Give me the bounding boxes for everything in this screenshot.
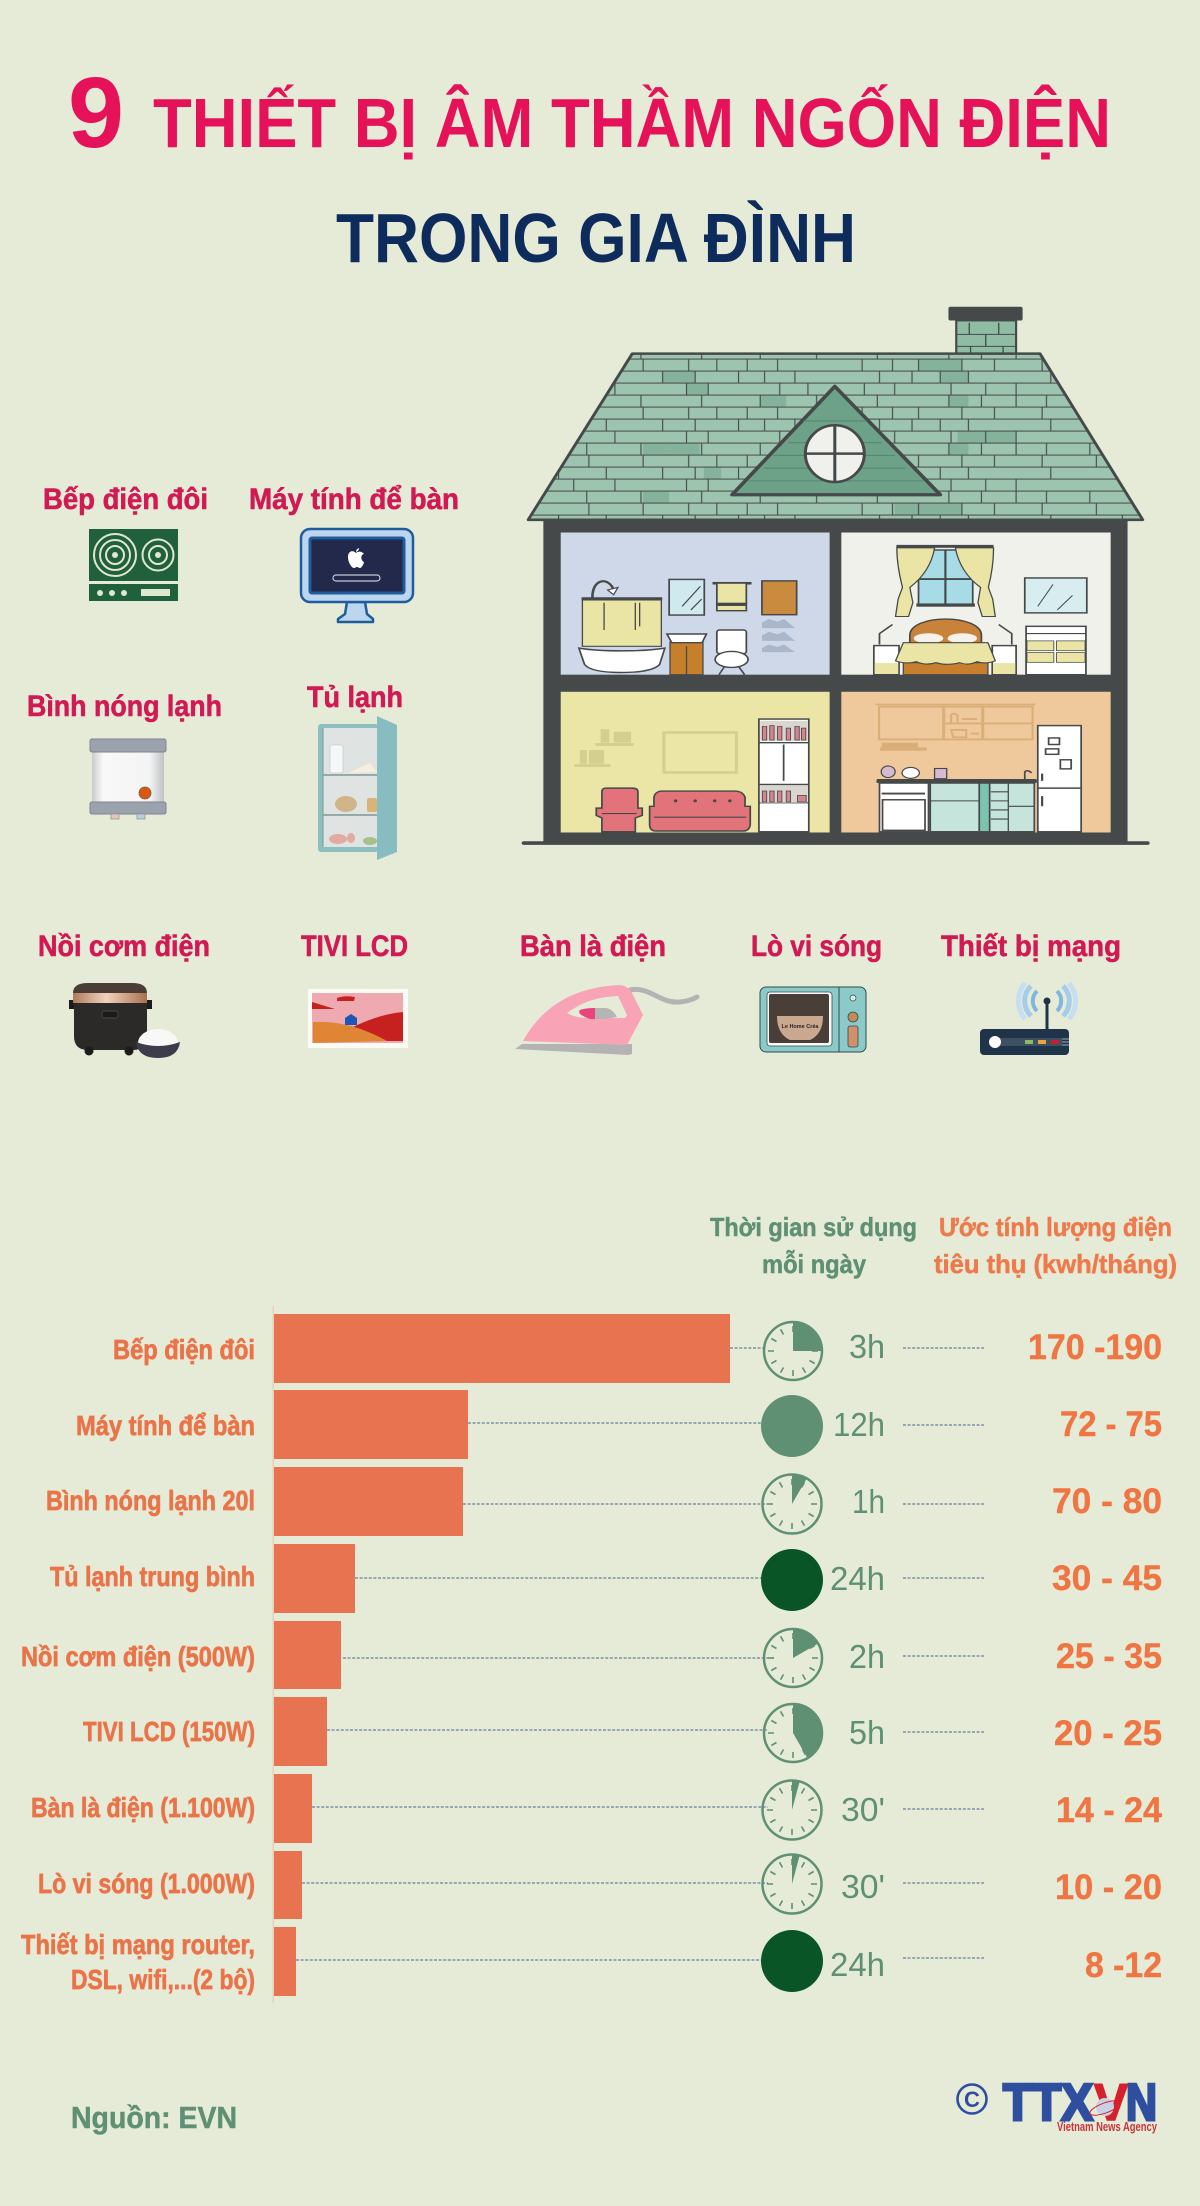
row: Bình nóng lạnh 20l: 70 - 80 (1052, 1482, 1162, 1521)
row: Thiết bị mạng: 8 -12 (1085, 1946, 1162, 1985)
device labels and icons (27, 483, 1121, 1058)
logo: TTXVN: N (1126, 2074, 1157, 2132)
dormer with round window (732, 386, 940, 495)
room: kitchen (841, 692, 1111, 832)
row: Thiết bị mạng (21, 1927, 1162, 1996)
row: Nồi cơm điện: 25 - 35 (1056, 1637, 1162, 1676)
room: bedroom (841, 533, 1111, 675)
label: Bếp điện đôi (43, 483, 208, 516)
icon: stove (89, 529, 178, 601)
logo: TTXVN: C (964, 2087, 980, 2112)
row: TIVI LCD: TIVI LCD (150W) (83, 1716, 255, 1747)
row: Bàn là điện: 14 - 24 (1056, 1791, 1163, 1830)
label: Bình nóng lạnh (27, 690, 222, 723)
row: Lò vi sóng (38, 1851, 1162, 1919)
device: desktop computer (249, 483, 459, 622)
device: double electric stove (43, 483, 208, 601)
icon: water heater (90, 739, 166, 819)
label: Thiết bị mạng (941, 930, 1121, 963)
row: Bàn là điện: 30' (841, 1791, 885, 1828)
label: TIVI LCD (301, 930, 408, 963)
row: Thiết bị mạng: Thiết bị mạng router, (21, 1929, 255, 1960)
device: LCD TV (301, 930, 408, 1048)
row: Tủ lạnh trung bình: 24h (830, 1560, 885, 1597)
row: Máy tính để bàn: 12h (833, 1406, 885, 1443)
row: Bàn là điện (31, 1774, 1163, 1843)
device: microwave (751, 930, 882, 1052)
source: Nguồn: EVN (71, 2100, 237, 2135)
row: Bình nóng lạnh 20l: Bình nóng lạnh 20l (46, 1485, 255, 1516)
title line 1: THIẾT BỊ ÂM THẦM NGỐN ĐIỆN (153, 83, 1111, 162)
logo: TTXVN: V (1094, 2074, 1128, 2132)
device: electric iron (515, 930, 697, 1055)
header: estimated consumption: tiêu thụ (kwh/tháng) (934, 1249, 1177, 1279)
title line 2: TRONG GIA ĐÌNH (336, 199, 856, 277)
row: Lò vi sóng: 30' (841, 1868, 885, 1905)
label: Máy tính để bàn (249, 483, 459, 516)
title (68, 57, 1111, 277)
room: bathroom (561, 533, 830, 675)
bar chart (21, 1306, 1163, 2003)
row: Nồi cơm điện: 2h (849, 1638, 885, 1675)
header: estimated consumption: Ước tính lượng điện (939, 1212, 1172, 1242)
row: Bếp điện đôi: 3h (849, 1328, 885, 1365)
label: Tủ lạnh (307, 681, 403, 714)
header: daily usage time: Thời gian sử dụng (710, 1212, 917, 1242)
house walls (522, 520, 1150, 845)
row: Máy tính để bàn (76, 1390, 1162, 1459)
row: Thiết bị mạng: DSL, wifi,...(2 bộ) (71, 1964, 255, 1995)
row: TIVI LCD: 5h (849, 1714, 885, 1751)
icon: iron (515, 985, 697, 1055)
row: Nồi cơm điện (21, 1621, 1162, 1689)
icon: rice cooker (69, 983, 180, 1058)
logo: TTXVN (958, 2074, 1158, 2134)
icon: microwave: Le Home Créa (782, 1024, 819, 1030)
header: daily usage time: mỗi ngày (762, 1249, 866, 1279)
logo: TTXVN: TTX (1003, 2074, 1093, 2132)
row: Bếp điện đôi: Bếp điện đôi (113, 1334, 255, 1365)
label: Bàn là điện (520, 930, 666, 963)
row: TIVI LCD: 20 - 25 (1054, 1714, 1162, 1753)
header: estimated consumption (934, 1212, 1177, 1279)
device: refrigerator (307, 681, 403, 860)
row: TIVI LCD (83, 1697, 1162, 1766)
device: rice cooker (38, 930, 210, 1058)
row: Bình nóng lạnh 20l (46, 1467, 1162, 1536)
device: water heater (27, 690, 222, 819)
icon: TV picture (308, 989, 408, 1048)
house illustration (522, 307, 1150, 845)
row: Bếp điện đôi: 170 -190 (1028, 1328, 1162, 1367)
row: Thiết bị mạng: 24h (830, 1946, 885, 1983)
icon: router (980, 983, 1076, 1055)
row: Bàn là điện: Bàn là điện (1.100W) (31, 1792, 255, 1823)
row: Bình nóng lạnh 20l: 1h (852, 1483, 885, 1520)
label: Nồi cơm điện (38, 930, 210, 963)
row: Tủ lạnh trung bình: 30 - 45 (1052, 1559, 1162, 1598)
row: Tủ lạnh trung bình: Tủ lạnh trung bình (50, 1561, 255, 1592)
row: Lò vi sóng: 10 - 20 (1055, 1868, 1162, 1907)
logo: TTXVN: Vietnam News Agency (1057, 2119, 1158, 2134)
row: Bếp điện đôi (113, 1314, 1162, 1383)
room: living room (561, 692, 830, 832)
column headers (710, 1212, 1177, 1279)
row: Máy tính để bàn: 72 - 75 (1060, 1405, 1162, 1444)
label: Lò vi sóng (751, 930, 882, 963)
row: Lò vi sóng: Lò vi sóng (1.000W) (38, 1868, 255, 1899)
icon: open fridge (318, 716, 397, 860)
row: Tủ lạnh trung bình (50, 1544, 1162, 1613)
chimney (948, 307, 1023, 355)
device: network router (941, 930, 1121, 1055)
title number 9: 9 (68, 57, 124, 169)
header: daily usage time (710, 1212, 917, 1279)
row: Máy tính để bàn: Máy tính để bàn (76, 1410, 255, 1441)
row: Nồi cơm điện: Nồi cơm điện (500W) (21, 1641, 255, 1672)
roof (528, 354, 1143, 520)
icon: monitor (301, 529, 413, 622)
